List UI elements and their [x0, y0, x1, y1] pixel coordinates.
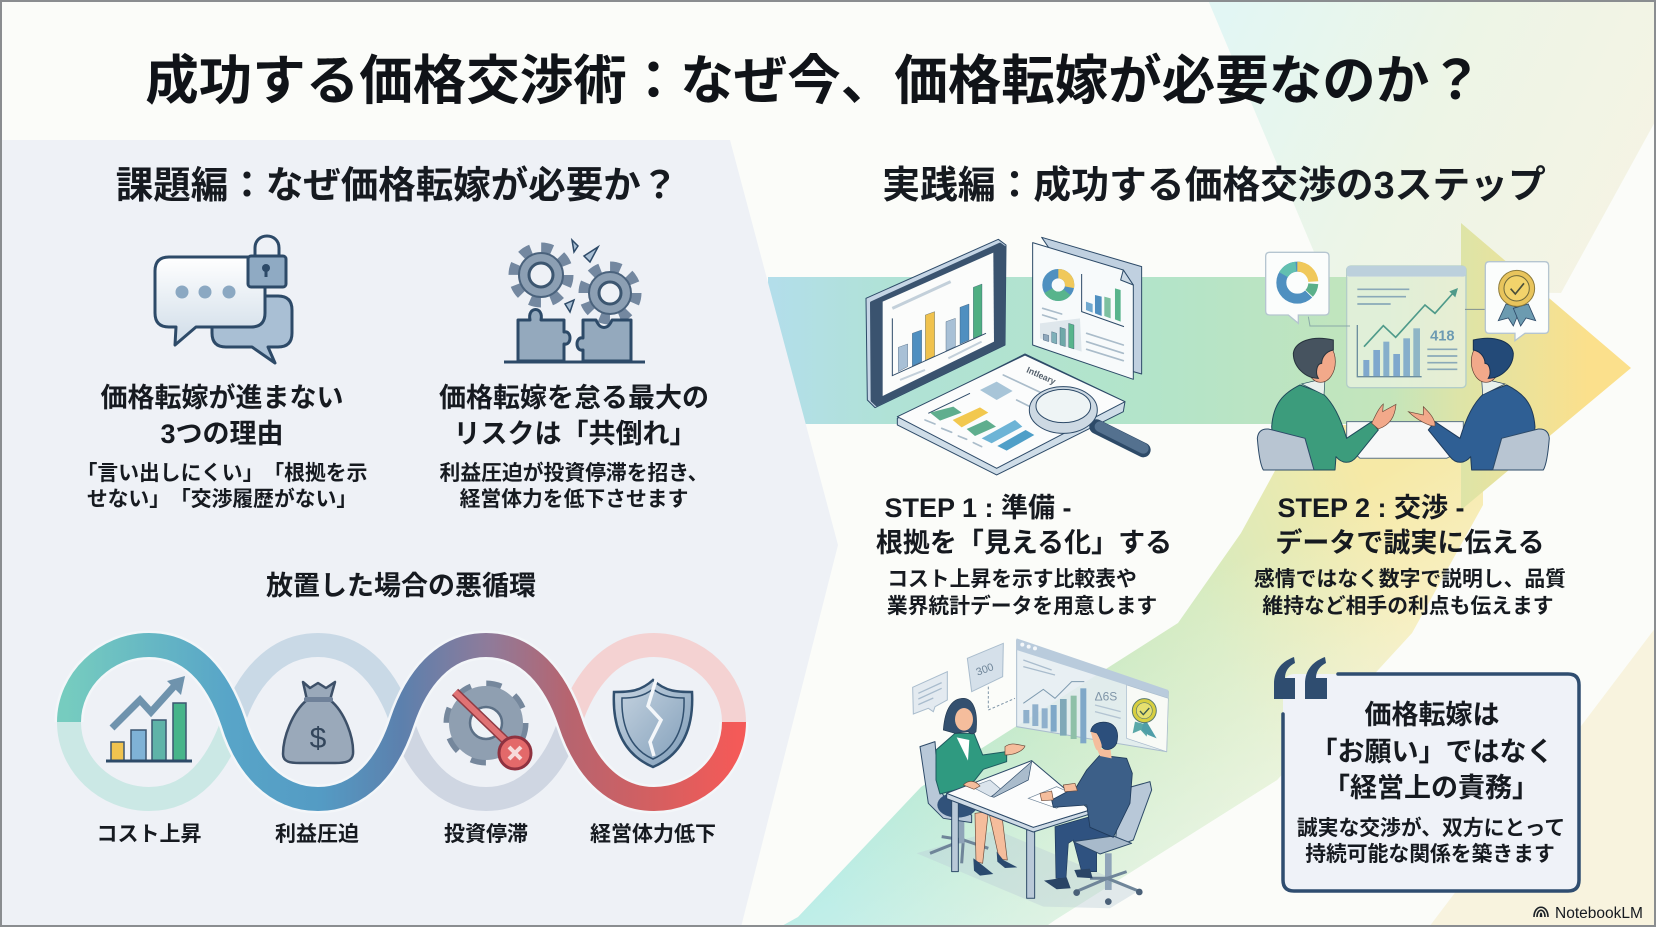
callout: bubble lines — [913, 672, 947, 714]
chart panel: 418 — [1430, 329, 1455, 345]
label: weakening: 経営体力低下 — [590, 823, 716, 846]
figure: left person — [1257, 338, 1396, 470]
callout: badge — [1485, 262, 1549, 341]
callout: quote box — [1274, 657, 1579, 891]
callout: donut — [1266, 252, 1329, 323]
icon: stopped gear — [450, 687, 531, 769]
arrow: large chevron — [768, 223, 1631, 510]
text block: biggest risk: 価格転嫁を怠る最大の — [439, 383, 709, 413]
callout: bubble 300: 300 — [975, 661, 995, 679]
figure: right person — [1408, 338, 1549, 470]
floating screen: Δ6S — [1095, 690, 1117, 704]
callout: quote box: 「お願い」ではなく — [1310, 737, 1554, 767]
callout: quote box: 価格転嫁は — [1364, 700, 1500, 730]
callout: bubble 300 — [967, 643, 1015, 710]
text block: biggest risk: リスクは「共倒れ」 — [454, 419, 696, 449]
label: profit squeeze: 利益圧迫 — [275, 823, 359, 846]
label: investment stall: 投資停滞 — [444, 823, 528, 846]
panel: challenges — [0, 140, 838, 927]
text block: step 2: 維持など相手の利点も伝えます — [1262, 595, 1554, 618]
callout: quote box: 「経営上の責務」 — [1323, 773, 1539, 803]
callout: quote box: 持続可能な関係を築きます — [1305, 843, 1555, 866]
illustration: step 1 documents: Intleary — [1025, 365, 1057, 386]
icon: cracked shield — [614, 680, 692, 767]
icon: money bag: $ — [310, 722, 327, 755]
text block: step 2 — [1254, 493, 1566, 618]
label: cost rising: コスト上昇 — [96, 823, 202, 846]
figure: woman — [920, 698, 1025, 876]
text block: step 1: 根拠を「見える化」する — [876, 528, 1172, 558]
text block: step 2: 感情ではなく数字で説明し、品質 — [1254, 567, 1566, 591]
chart panel — [1347, 266, 1466, 388]
icon: cost rising bars — [106, 676, 192, 761]
text block: three reasons: 価格転嫁が進まない — [100, 382, 344, 413]
text block: three reasons: 「言い出しにくい」「根拠を示 — [77, 462, 367, 485]
text block: three reasons — [77, 382, 367, 511]
icon: money bag — [283, 682, 353, 763]
icon: quote marks — [1274, 657, 1327, 699]
icon: broken gears and puzzle — [504, 240, 645, 362]
figure: desk — [947, 761, 1090, 898]
text block: biggest risk — [439, 383, 709, 511]
floating screen — [1017, 638, 1168, 752]
heading: practice: 実践編：成功する価格交渉の3ステップ — [882, 165, 1546, 207]
chart: vicious cycle loop — [69, 645, 734, 799]
text block: three reasons: 3つの理由 — [160, 419, 284, 449]
logo: NotebookLM: NotebookLM — [1555, 905, 1643, 922]
text block: step 1 — [876, 493, 1172, 618]
text block: step 2: データで誠実に伝える — [1275, 527, 1545, 558]
text block: step 2: STEP 2 : 交渉 - — [1277, 493, 1465, 523]
text block: step 1: STEP 1 : 準備 - — [884, 493, 1072, 523]
heading: vicious cycle: 放置した場合の悪循環 — [266, 571, 536, 601]
icon: locked chat bubbles — [155, 236, 292, 363]
title: 成功する価格交渉術：なぜ今、価格転嫁が必要なのか？ — [145, 52, 1483, 111]
text block: biggest risk: 利益圧迫が投資停滞を招き、 — [440, 461, 708, 485]
figure: man — [1040, 722, 1152, 905]
heading: challenges: 課題編：なぜ価格転嫁が必要か？ — [116, 164, 678, 206]
illustration: step 3 agreement — [913, 638, 1168, 908]
text block: step 1: コスト上昇を示す比較表や — [887, 568, 1137, 591]
text block: three reasons: せない」「交渉履歴がない」 — [87, 487, 357, 511]
callout: quote box: 誠実な交渉が、双方にとって — [1297, 816, 1565, 840]
illustration: step 2 negotiation — [1257, 252, 1549, 470]
text block: step 1: 業界統計データを用意します — [887, 594, 1157, 618]
illustration: step 1 documents — [866, 237, 1143, 475]
text block: biggest risk: 経営体力を低下させます — [460, 488, 688, 511]
